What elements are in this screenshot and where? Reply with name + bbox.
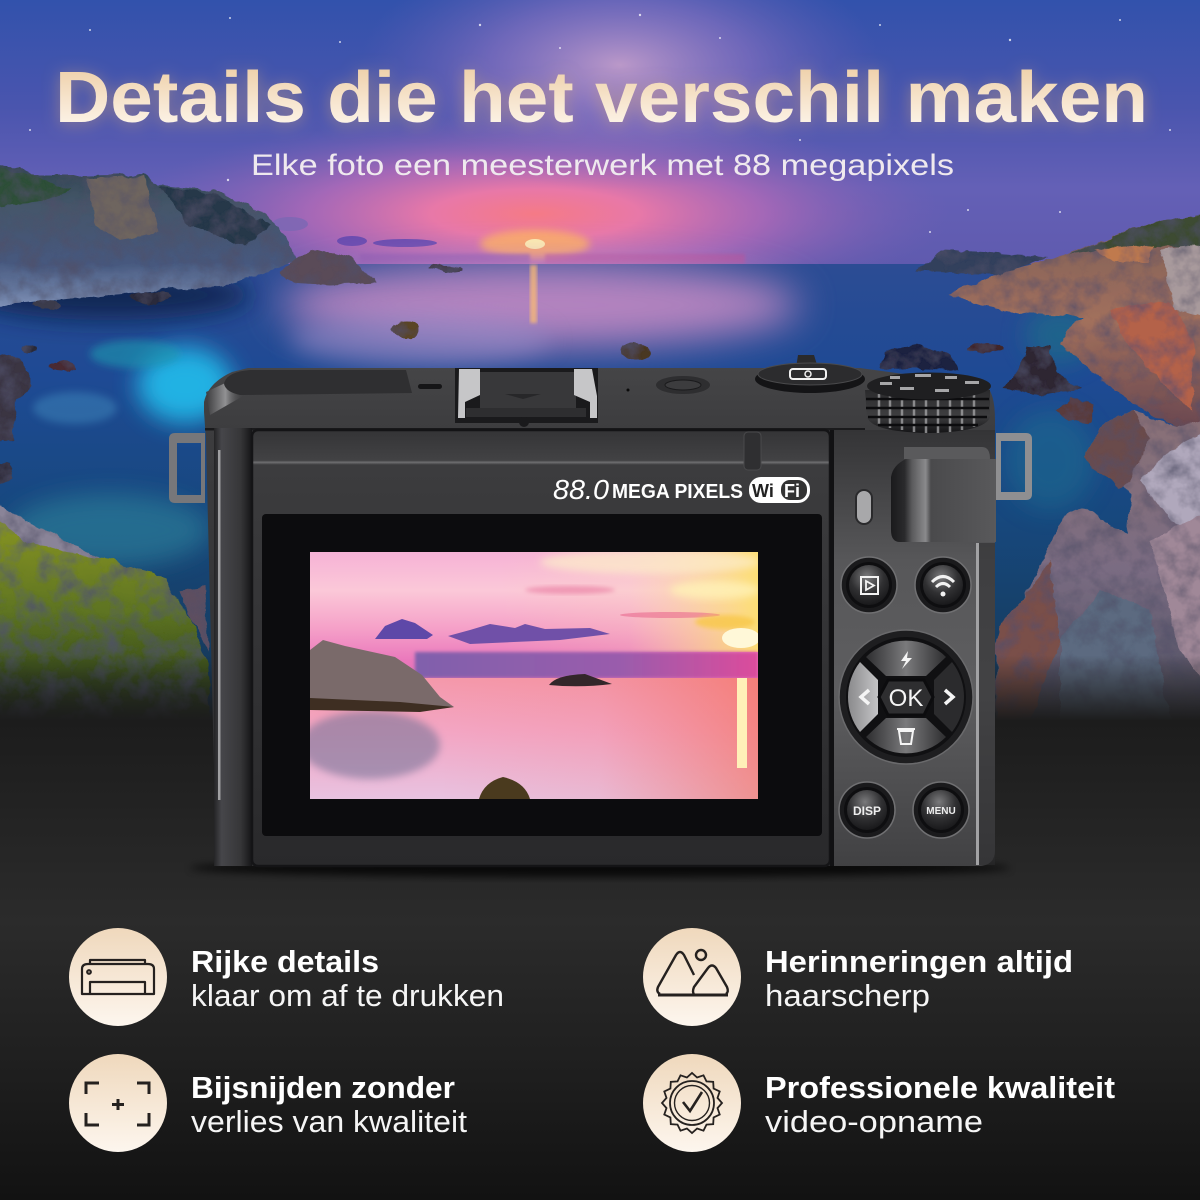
bush [0, 514, 210, 730]
sun [525, 239, 545, 249]
model label: MEGA PIXELS [612, 481, 743, 503]
icon: crop frame [69, 1054, 167, 1152]
led indicator [856, 490, 872, 524]
play button [841, 557, 897, 613]
mode dial [865, 372, 991, 433]
feature: bijsnijden zonder: verlies van kwaliteit [191, 1104, 467, 1139]
camera [169, 355, 1032, 877]
directional pad [839, 630, 973, 764]
strap lug left [169, 433, 205, 503]
upper right cliff [950, 214, 1200, 427]
left hinge [214, 428, 252, 866]
sky [0, 0, 1200, 268]
clouds [272, 217, 745, 264]
model label: Fi [784, 481, 800, 501]
feature: rijke details [69, 928, 504, 1026]
DISP button [839, 782, 895, 838]
DISP button: DISP [853, 804, 881, 818]
icon: mountains [643, 928, 741, 1026]
photo on screen [300, 550, 760, 799]
far headland [915, 250, 1050, 275]
screen [262, 514, 822, 836]
feature: herinneringen altijd [643, 928, 1073, 1026]
stars [29, 14, 1171, 233]
fade to dark [0, 655, 1200, 721]
feature: bijsnijden zonder [69, 1054, 467, 1152]
strap lug right [996, 433, 1032, 500]
feature: herinneringen altijd: haarscherp [765, 978, 930, 1013]
rocks and cliffs [0, 165, 1200, 730]
feature: professionele kwaliteit: video-opname [765, 1104, 983, 1139]
directional pad: OK [889, 685, 923, 712]
sea [0, 264, 1200, 720]
left shore rocks [0, 354, 32, 441]
MENU button [913, 782, 969, 838]
icon: printer [69, 928, 167, 1026]
lower left rock [0, 497, 100, 570]
right control panel [832, 430, 995, 866]
MENU button: MENU [926, 806, 956, 817]
camera body [204, 368, 995, 866]
model label: 88.0 [553, 474, 609, 505]
rock islet [280, 247, 378, 285]
hot shoe [455, 368, 598, 427]
display panel [252, 430, 830, 866]
dark lower panel [0, 720, 1200, 1200]
subtitle: Elke foto een meesterwerk met 88 megapixels [251, 149, 954, 182]
power button [626, 376, 710, 394]
model label [553, 474, 810, 505]
title: Details die het verschil maken [55, 58, 1148, 138]
text: Bijsnijden zonder [191, 1070, 455, 1105]
wifi button [915, 557, 971, 613]
shutter dial [755, 355, 865, 393]
camera shadow [190, 859, 1010, 877]
mid sea rocks [430, 265, 464, 271]
text: Herinneringen altijd [765, 944, 1073, 979]
text: Rijke details [191, 944, 379, 979]
model label: Wi [752, 481, 774, 501]
background: sunset landscape [0, 0, 1200, 730]
lower right cliffs [995, 410, 1200, 730]
icon: quality seal [643, 1054, 741, 1152]
feature: rijke details: klaar om af te drukken [191, 978, 504, 1013]
feature: professionele kwaliteit [643, 1054, 1115, 1152]
thumb rest [891, 447, 996, 542]
text: Professionele kwaliteit [765, 1070, 1115, 1105]
headland left [0, 165, 298, 306]
